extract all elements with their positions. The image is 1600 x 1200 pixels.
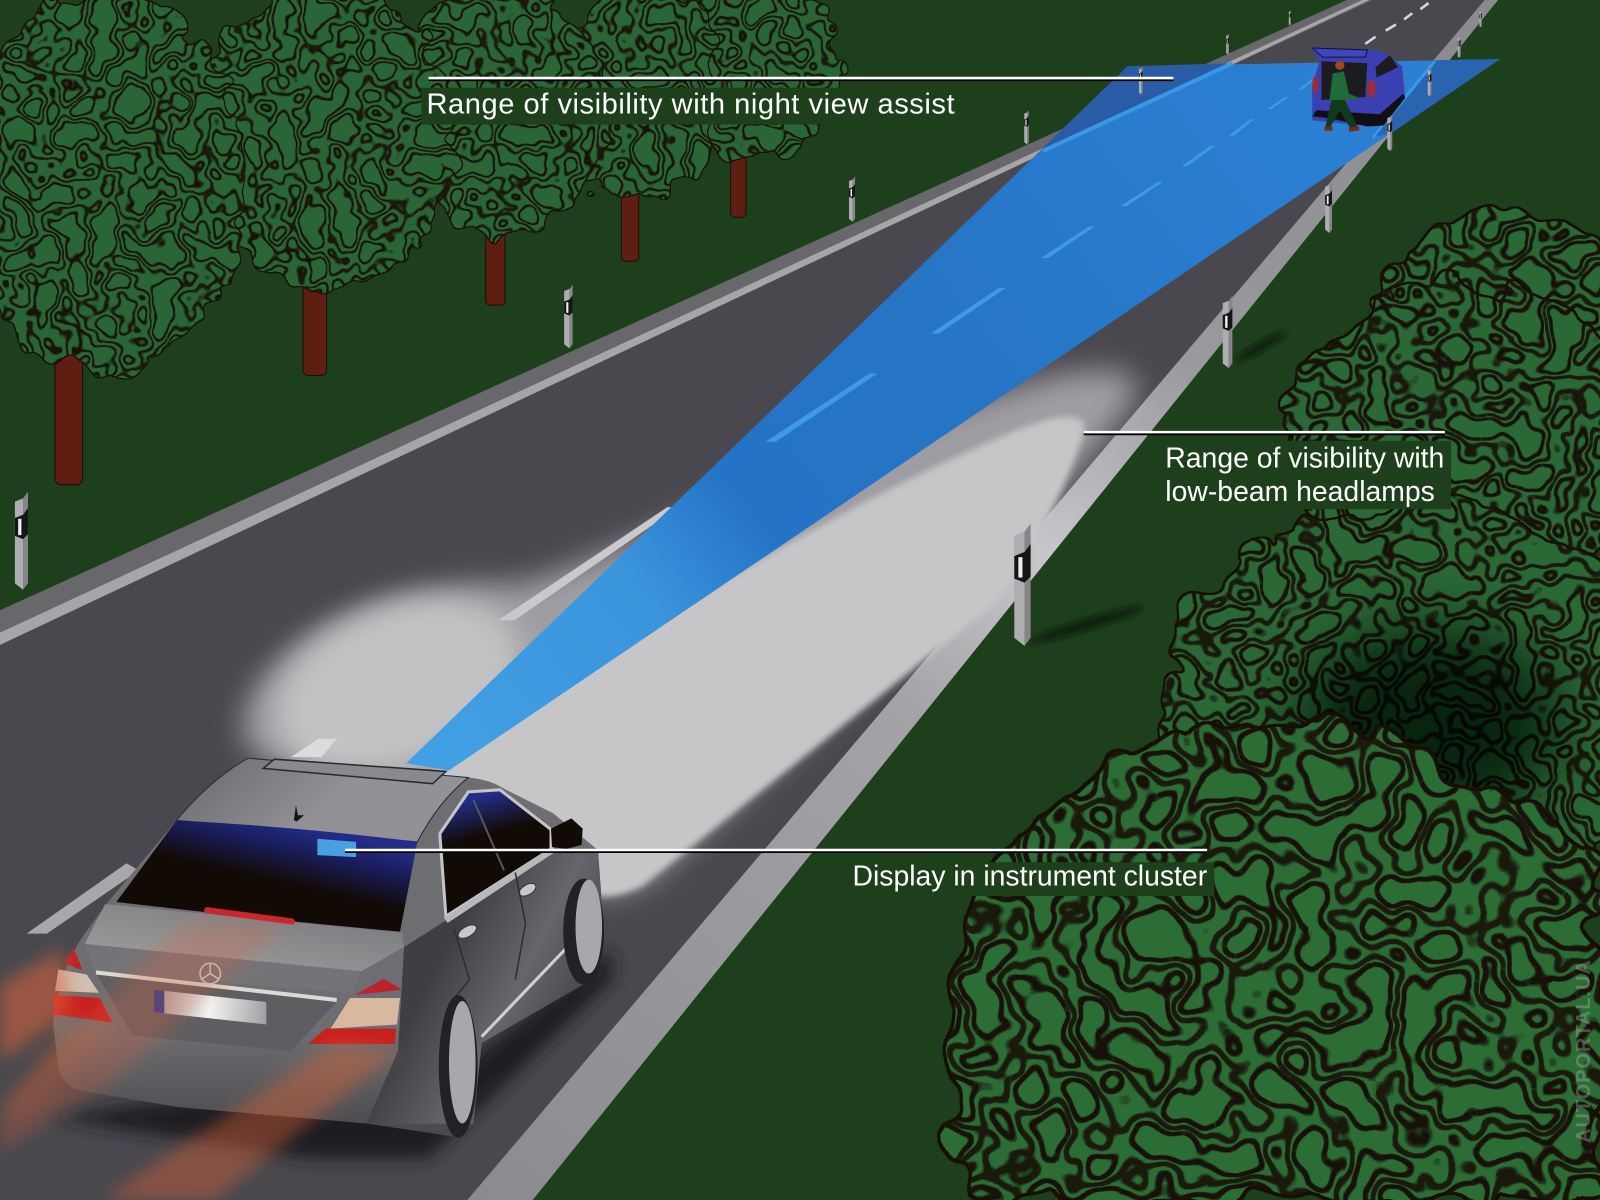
car shadow <box>51 949 612 1158</box>
label: display in instrument cluster <box>345 850 1214 896</box>
blue over right verge <box>1369 59 1500 138</box>
tree 1 <box>0 0 245 485</box>
antenna <box>294 805 304 821</box>
door lines <box>449 872 526 1005</box>
road edge highlights in blue <box>1043 61 1435 151</box>
bush front <box>943 715 1600 1200</box>
roadside trees <box>0 0 839 485</box>
low-beam headlamp light cone <box>243 370 1137 896</box>
label: range of visibility with night view assist: Range of visibility with night view assist <box>427 88 955 120</box>
label: display in instrument cluster: Display in instrument cluster <box>853 861 1207 893</box>
label: range of visibility with night view assist <box>421 78 1173 124</box>
tree 3 <box>392 0 608 305</box>
belt line <box>446 849 554 920</box>
rear window <box>116 820 417 932</box>
car body <box>53 758 604 1137</box>
mirror <box>551 818 583 849</box>
right-hand bushes <box>943 206 1600 1200</box>
lane marking near car <box>27 863 139 934</box>
sunroof <box>263 759 446 784</box>
bush second <box>1284 286 1600 592</box>
bush shadow <box>1296 628 1561 821</box>
right tail light <box>308 979 402 1044</box>
rear wheel <box>439 995 478 1138</box>
car roof <box>177 758 468 842</box>
door handles <box>456 881 538 941</box>
van side window <box>1376 55 1398 78</box>
label: range of visibility with low-beam headlamps: Range of visibility with <box>1165 442 1444 474</box>
trunk lid <box>85 904 404 971</box>
label: range of visibility with low-beam headlamps <box>1084 432 1451 509</box>
left tail light <box>53 948 112 1022</box>
door sill chrome <box>482 945 569 1037</box>
red light streaks <box>0 923 398 1200</box>
label: range of visibility with low-beam headlamps: low-beam headlamps <box>1165 476 1435 508</box>
side window pillar <box>473 800 504 870</box>
marker posts near and right <box>1014 114 1392 648</box>
lane dashes in blue <box>765 80 1314 442</box>
tree 4 <box>563 0 722 261</box>
star emblem <box>200 963 220 984</box>
plate recess <box>96 972 337 1051</box>
bush far <box>1381 206 1600 447</box>
night view assist blue range <box>406 59 1500 770</box>
marker posts left side <box>15 10 1482 590</box>
side windows <box>440 790 551 916</box>
bush third <box>1163 505 1600 903</box>
road centre dashes far <box>1365 3 1429 44</box>
car side panel <box>366 850 604 1123</box>
car <box>0 758 612 1200</box>
chrome strip <box>96 972 337 1000</box>
marker posts inside blue range and right side <box>1139 66 1431 97</box>
licence plate <box>154 990 266 1024</box>
brake light <box>207 910 292 921</box>
van body <box>1311 48 1405 126</box>
van load opening <box>1321 61 1367 100</box>
tree 5 <box>667 0 839 217</box>
front wheel <box>563 879 604 985</box>
watermark: AUTOPORTAL.UA <box>1573 959 1595 1143</box>
blue over left verge <box>1041 63 1233 150</box>
instrument cluster display <box>317 839 356 857</box>
van with person at the roadside <box>1311 48 1405 132</box>
person <box>1324 61 1359 132</box>
tree 2 <box>196 0 453 376</box>
van tail lights <box>1312 77 1318 93</box>
trunk panel <box>85 944 361 993</box>
